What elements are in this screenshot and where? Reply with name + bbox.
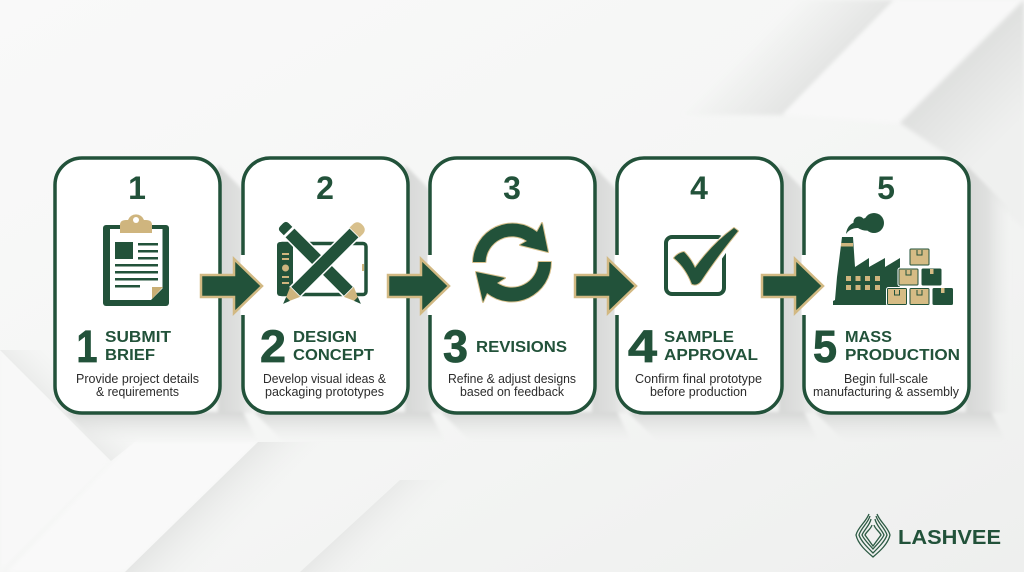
icon: factory and boxes: [833, 213, 954, 306]
title: mass production: MASS: [845, 329, 892, 346]
description: Begin full-scale: [844, 372, 928, 386]
title: sample approval: APPROVAL: [664, 347, 758, 364]
title: design concept: CONCEPT: [293, 347, 375, 364]
step number 3: 3: [503, 170, 521, 206]
big number 5: 5: [813, 321, 837, 372]
description: [76, 372, 199, 399]
title: design concept: DESIGN: [293, 329, 357, 346]
icon: crossed pencils and tablet: [277, 220, 367, 309]
description: manufacturing & assembly: [813, 385, 960, 399]
title: design concept: [293, 329, 375, 364]
title: submit brief: [105, 329, 172, 364]
description: & requirements: [96, 385, 179, 399]
description: [813, 372, 960, 399]
title: mass production: PRODUCTION: [845, 347, 960, 364]
panel: step 4 sample approval: [617, 158, 782, 413]
title: sample approval: SAMPLE: [664, 329, 734, 346]
description: [635, 372, 762, 399]
card shadows: [66, 165, 1010, 442]
icon: clipboard: [103, 214, 169, 306]
icon: checkbox with check mark: [666, 228, 738, 294]
description: Develop visual ideas &: [263, 372, 387, 386]
panel: step 3 revisions: [430, 158, 595, 413]
step number 4: 4: [690, 170, 708, 206]
logo: Lashvee: [856, 514, 1001, 557]
description: based on feedback: [460, 385, 565, 399]
big number 3: 3: [443, 321, 468, 372]
icon: revision cycle arrows: [473, 223, 551, 302]
step number 2: 2: [316, 170, 334, 206]
description: packaging prototypes: [265, 385, 384, 399]
arrow: step 4 to 5: [762, 255, 823, 315]
description: Refine & adjust designs: [448, 372, 576, 386]
wordmark: LASHVEE: [898, 527, 1001, 549]
description: Confirm final prototype: [635, 372, 762, 386]
title: submit brief: BRIEF: [105, 347, 155, 364]
description: [263, 372, 387, 399]
arrow: step 1 to 2: [201, 255, 262, 315]
arrow: step 3 to 4: [575, 255, 636, 315]
title: revisions: REVISIONS: [476, 339, 567, 356]
description: [448, 372, 576, 399]
arrow: step 2 to 3: [388, 255, 449, 315]
big number 2: 2: [260, 321, 286, 372]
description: before production: [650, 385, 747, 399]
step number 1: 1: [128, 170, 146, 206]
panel: step 1 submit brief: [55, 158, 220, 413]
big number 4: 4: [628, 321, 657, 372]
panel: step 2 design concept: [243, 158, 408, 413]
step number 5: 5: [877, 170, 895, 206]
title: submit brief: SUBMIT: [105, 329, 172, 346]
description: Provide project details: [76, 372, 199, 386]
title: mass production: [845, 329, 960, 364]
big number 1: 1: [76, 321, 98, 372]
icon: logo leaf mark: [856, 514, 890, 557]
panel: step 5 mass production: [804, 158, 969, 413]
title: sample approval: [664, 329, 758, 364]
